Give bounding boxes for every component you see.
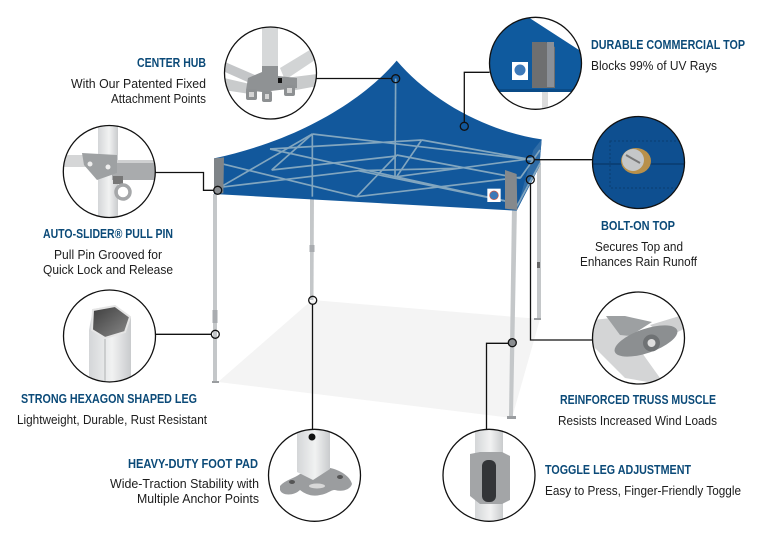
center hub marker xyxy=(392,75,400,83)
center hub heading: CENTER HUB xyxy=(137,56,206,70)
foot pad marker xyxy=(309,296,317,304)
pull pin text xyxy=(43,248,173,277)
toggle ring xyxy=(443,429,535,521)
center hub text: Attachment Points xyxy=(111,92,206,106)
truss frame xyxy=(220,79,540,207)
toggle connector xyxy=(486,343,508,430)
center hub ring xyxy=(224,27,316,119)
callout: bolt-on top xyxy=(526,116,697,269)
bolt connector xyxy=(534,159,592,161)
bolt text: Secures Top and xyxy=(595,240,683,254)
foot pad ring xyxy=(268,429,360,521)
center hub image xyxy=(224,27,318,102)
foot pad heading: HEAVY-DUTY FOOT PAD xyxy=(128,457,258,471)
foot pad connector xyxy=(312,304,314,430)
center hub connector xyxy=(316,78,392,80)
pull pin heading: AUTO-SLIDER® PULL PIN xyxy=(43,227,173,241)
front corner bracket xyxy=(505,170,517,210)
hexagon leg heading: STRONG HEXAGON SHAPED LEG xyxy=(21,392,197,406)
canopy tent xyxy=(212,61,542,419)
callout: hexagon leg xyxy=(17,290,219,427)
bolt text: Enhances Rain Runoff xyxy=(580,255,697,269)
durable top image xyxy=(489,17,582,112)
bolt ring xyxy=(592,116,684,208)
canopy top xyxy=(214,61,542,211)
foot pad image xyxy=(280,428,352,496)
hexagon leg connector xyxy=(156,333,211,335)
toggle text: Easy to Press, Finger-Friendly Toggle xyxy=(545,484,741,498)
callout: toggle leg adjustment xyxy=(443,339,741,524)
toggle heading: TOGGLE LEG ADJUSTMENT xyxy=(545,463,691,477)
bolt heading: BOLT-ON TOP xyxy=(601,219,675,233)
durable top text: Blocks 99% of UV Rays xyxy=(591,59,717,73)
durable top connector xyxy=(464,72,490,122)
foot pad text: Multiple Anchor Points xyxy=(137,492,259,506)
pull pin ring xyxy=(63,126,155,218)
tent legs xyxy=(212,160,541,419)
pull pin text: Pull Pin Grooved for xyxy=(54,248,162,262)
callout: foot pad xyxy=(110,296,360,521)
hexagon leg image xyxy=(89,305,131,385)
logo patch xyxy=(487,189,501,202)
truss muscle text: Resists Increased Wind Loads xyxy=(558,414,717,428)
bolt text xyxy=(580,240,697,269)
canopy right side panel xyxy=(517,139,542,211)
pull pin image xyxy=(62,125,158,220)
durable top ring xyxy=(490,17,582,109)
left corner bracket xyxy=(214,157,224,193)
bolt marker xyxy=(526,156,534,164)
hexagon leg text: Lightweight, Durable, Rust Resistant xyxy=(17,413,207,427)
center hub text: With Our Patented Fixed xyxy=(71,77,206,91)
truss muscle image xyxy=(593,316,683,382)
durable top heading: DURABLE COMMERCIAL TOP xyxy=(591,38,745,52)
truss muscle ring xyxy=(592,292,684,384)
floor shadow xyxy=(218,300,540,418)
toggle image xyxy=(470,428,510,524)
callout: auto-slider pull pin xyxy=(43,125,222,277)
bolt image xyxy=(593,117,684,208)
durable top marker xyxy=(460,122,468,130)
truss muscle marker xyxy=(526,176,534,184)
toggle marker xyxy=(508,339,516,347)
truss muscle heading: REINFORCED TRUSS MUSCLE xyxy=(560,393,716,407)
truss muscle connector xyxy=(530,184,592,340)
foot pad text: Wide-Traction Stability with xyxy=(110,477,259,491)
center hub text xyxy=(71,77,206,106)
logo patch xyxy=(512,62,528,80)
pull pin connector xyxy=(156,172,214,190)
pull pin marker xyxy=(214,186,222,194)
pull pin text: Quick Lock and Release xyxy=(43,263,173,277)
callout: reinforced truss muscle xyxy=(526,176,717,428)
hexagon leg ring xyxy=(64,290,156,382)
callout: durable commercial top xyxy=(460,17,745,130)
hexagon leg marker xyxy=(211,330,219,338)
callout: center hub xyxy=(71,27,400,119)
foot pad text xyxy=(110,477,259,506)
